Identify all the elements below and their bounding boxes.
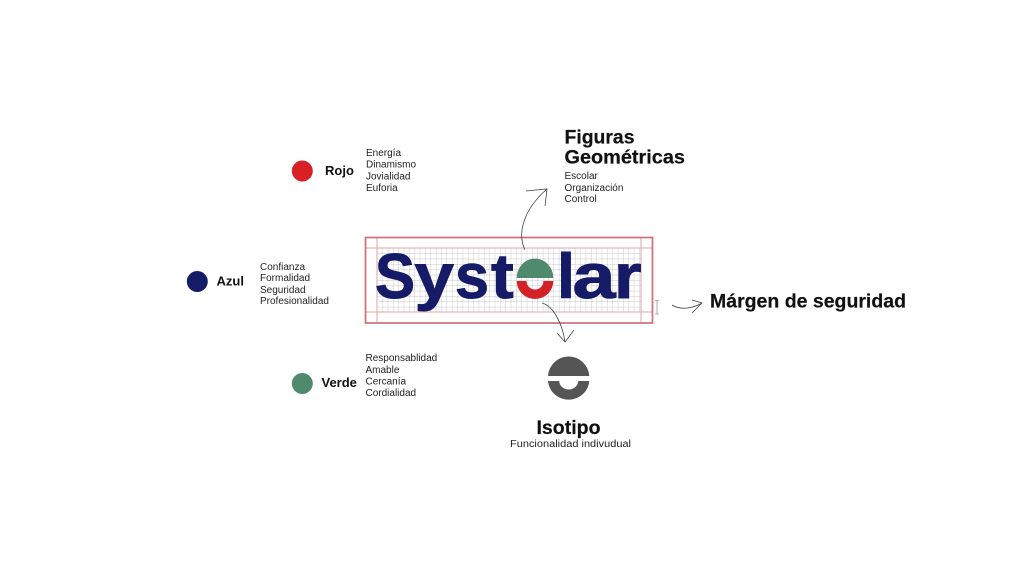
heading: Isotipo — [510, 417, 631, 450]
logo: Systolar: l — [557, 242, 575, 312]
logo: Systolar: S — [375, 242, 415, 312]
color item: Verde: Verde — [322, 375, 357, 390]
logo: Systolar: s — [455, 242, 489, 312]
color item: Verde — [292, 353, 437, 399]
heading: Figuras Geométricas: Control — [564, 194, 597, 205]
logo isotype: red smile — [517, 281, 553, 299]
heading: Isotipo: Funcionalidad indivudual — [510, 439, 631, 450]
color item: Azul: Azul — [216, 274, 244, 288]
heading: Figuras Geométricas: Escolar — [564, 171, 599, 182]
heading: Márgen de seguridad: Márgen de seguridad — [710, 290, 906, 312]
logo: Systolar — [375, 242, 642, 312]
logo isotype: green top half — [517, 259, 553, 278]
color item: Verde: Amable — [366, 365, 400, 376]
color item: Verde: Cercanía — [366, 376, 407, 388]
icon: isotipo — [548, 356, 589, 400]
margin size marker — [655, 300, 659, 314]
logo: Systolar: t — [491, 242, 514, 312]
color item: Verde: Cordialidad — [366, 388, 416, 399]
logo: Systolar: a — [572, 242, 617, 312]
color item: Rojo: Euforia — [366, 183, 398, 194]
heading: Isotipo: Isotipo — [536, 417, 601, 439]
color item: Rojo: Jovialidad — [366, 172, 410, 182]
color item: Verde: Responsablidad — [366, 353, 437, 364]
arrow: logo to Isotipo — [542, 303, 574, 342]
color item: Azul: Profesionalidad — [260, 296, 329, 307]
logo: Systolar: y — [414, 242, 454, 312]
heading: Figuras Geométricas: Geométricas — [564, 146, 685, 168]
color item: Azul — [187, 262, 329, 307]
logo: Systolar: r — [614, 242, 642, 312]
color item: Azul: Formalidad — [260, 273, 310, 284]
heading: Figuras Geométricas: Figuras — [564, 126, 635, 148]
heading: Figuras Geométricas — [564, 126, 685, 205]
arrow: margin to Márgen de seguridad — [672, 300, 702, 313]
logo construction grid with safety margin — [366, 238, 652, 323]
color item: Rojo: Rojo — [325, 163, 354, 178]
color item: Azul: Seguridad — [260, 285, 306, 296]
color item: Rojo — [292, 148, 416, 194]
heading: Figuras Geométricas: Organización — [564, 183, 623, 194]
color item: Rojo: Dinamismo — [366, 160, 416, 170]
color item: Azul: Confianza — [260, 262, 305, 273]
arrow: logo to Figuras Geométricas — [522, 189, 547, 250]
color item: Rojo: Energía — [366, 148, 401, 159]
